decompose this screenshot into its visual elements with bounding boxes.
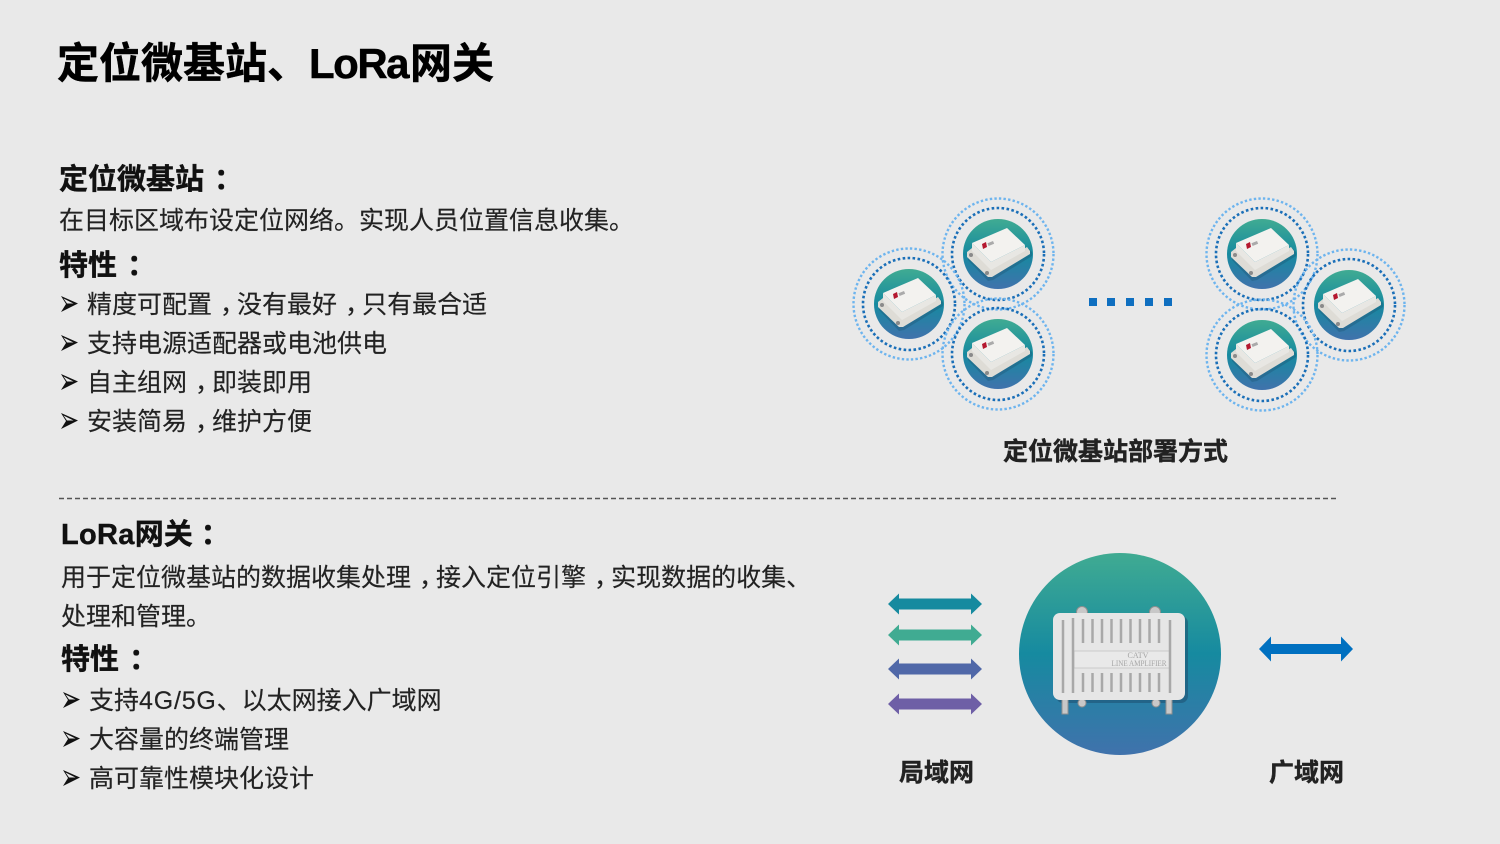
arrows: local area network	[888, 594, 982, 714]
bullet: capacity: 大容量的终端管理	[89, 726, 289, 754]
bullet: uplink: 支持4G/5G、以太网接入广域网	[89, 687, 442, 715]
description: micro base station: 在目标区域布设定位网络。实现人员位置信息收集。	[59, 207, 634, 235]
gateway body	[1053, 613, 1185, 700]
bullet: reliability: 高可靠性模块化设计	[89, 765, 314, 793]
divider	[59, 498, 1336, 500]
panel: LoRa gateway text	[61, 518, 811, 793]
gateway icon	[1019, 553, 1221, 755]
gateway label: LINE AMPLIFIER	[1112, 659, 1167, 668]
label: wide area network: 广域网	[1269, 759, 1344, 787]
arrow: wide area network	[1259, 636, 1353, 662]
gateway nameplate	[1074, 651, 1170, 668]
device cluster: left	[854, 198, 1054, 410]
gateway lugs	[1062, 606, 1172, 714]
feature list: micro base station	[61, 291, 487, 436]
description: LoRa gateway: 用于定位微基站的数据收集处理 ，接入定位引擎 ，实现数据的收集、	[61, 564, 811, 592]
feature list: LoRa gateway	[63, 687, 442, 793]
bullet: ad hoc network: 自主组网 ，即装即用	[87, 369, 312, 397]
heading: features: 特性 ：	[59, 250, 156, 282]
title: 定位微基站、LoRa网关	[57, 40, 494, 87]
panel: positioning micro base station text	[59, 164, 634, 436]
gateway label	[1112, 651, 1167, 668]
gateway label: CATV	[1128, 651, 1149, 660]
heading: LoRa gateway: LoRa网关 ：	[61, 519, 230, 551]
heading: features: 特性 ：	[61, 644, 158, 676]
device cluster: right	[1206, 198, 1404, 410]
bullet: power: 支持电源适配器或电池供电	[87, 330, 387, 358]
label: local area network: 局域网	[899, 759, 974, 787]
caption: deployment mode: 定位微基站部署方式	[1003, 438, 1228, 466]
bullet: precision: 精度可配置 ，没有最好 ，只有最合适	[87, 291, 487, 319]
description: LoRa gateway: 处理和管理。	[61, 602, 211, 630]
gateway shadow	[1056, 616, 1188, 703]
bullet: easy install: 安装简易 ，维护方便	[87, 408, 312, 436]
heading: micro base station: 定位微基站 ：	[59, 164, 243, 196]
ellipsis dots	[1089, 298, 1172, 306]
gateway ribs	[1063, 618, 1170, 693]
description: LoRa gateway	[61, 564, 811, 630]
